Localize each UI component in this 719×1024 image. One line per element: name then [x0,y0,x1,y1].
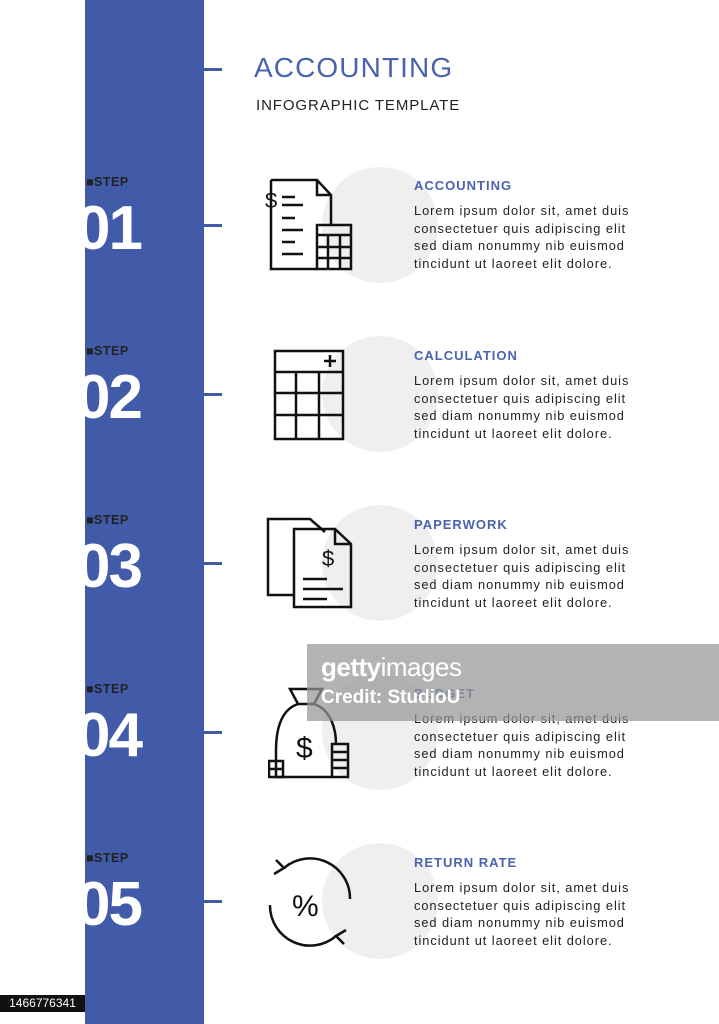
step 5 [76,843,629,959]
icon: return rate percent [268,857,352,947]
icon: invoice calculator [265,178,352,270]
step 2 [76,336,629,452]
step 2: 02 [76,363,141,432]
subtitle: INFOGRAPHIC TEMPLATE [256,97,460,114]
icon: money bag [268,688,350,778]
step 3: ■STEP [86,513,129,527]
step 2: sed diam nonummy nib euismod [414,408,625,423]
step 1: 01 [76,194,141,263]
step 4: 04 [76,701,141,770]
step 2: CALCULATION [414,348,518,363]
step 3: consectetuer quis adipiscing elit [414,560,626,574]
step 3: tincidunt ut laoreet elit dolore. [414,594,613,610]
watermark band: Credit: StudioU [321,687,460,708]
watermark band: gettyimages [321,652,461,682]
step 4 [76,682,629,790]
icon: invoice calculator: $ [265,188,277,213]
title: ACCOUNTING [254,52,453,83]
step 5: tincidunt ut laoreet elit dolore. [414,932,613,948]
step 4: BUDGET [414,686,475,701]
step 2: tincidunt ut laoreet elit dolore. [414,426,613,440]
step 5: 05 [76,870,141,939]
step 1 [76,167,629,283]
icon: documents: $ [322,546,334,571]
step 2: Lorem ipsum dolor sit, amet duis [414,373,629,388]
step 3: Lorem ipsum dolor sit, amet duis [414,542,629,557]
step 1: ■STEP [86,175,129,189]
icon: documents [266,518,352,608]
step 4: tincidunt ut laoreet elit dolore. [414,764,613,778]
watermark band [307,644,719,721]
step 5: ■STEP [86,851,129,865]
step 1: tincidunt ut laoreet elit dolore. [414,256,613,270]
step 1: consectetuer quis adipiscing elit [414,220,626,236]
step 3 [76,505,629,621]
connector ticks [204,68,222,903]
step 4: ■STEP [86,682,129,696]
icon: return rate percent: % [292,890,319,923]
step 4: consectetuer quis adipiscing elit [414,728,626,744]
step 1: sed diam nonummy nib euismod [414,238,625,253]
step 4: Lorem ipsum dolor sit, amet duis [414,711,629,726]
step 5: sed diam nonummy nib euismod [414,915,625,930]
step 5: RETURN RATE [414,855,517,870]
step 3: 03 [76,532,141,601]
step 2: ■STEP [86,344,129,358]
step 1: ACCOUNTING [414,178,512,193]
step 5: consectetuer quis adipiscing elit [414,898,626,912]
image id: 1466776341 [9,996,76,1010]
icon: money bag: $ [296,732,313,765]
icon: spreadsheet [274,350,344,440]
step 3: PAPERWORK [414,517,508,532]
step 4: sed diam nonummy nib euismod [414,746,625,761]
step 2: consectetuer quis adipiscing elit [414,390,626,406]
blue vertical bar [85,0,204,1024]
step 3: sed diam nonummy nib euismod [414,577,625,592]
image id [0,995,85,1012]
step 1: Lorem ipsum dolor sit, amet duis [414,203,629,218]
step 5: Lorem ipsum dolor sit, amet duis [414,880,629,895]
